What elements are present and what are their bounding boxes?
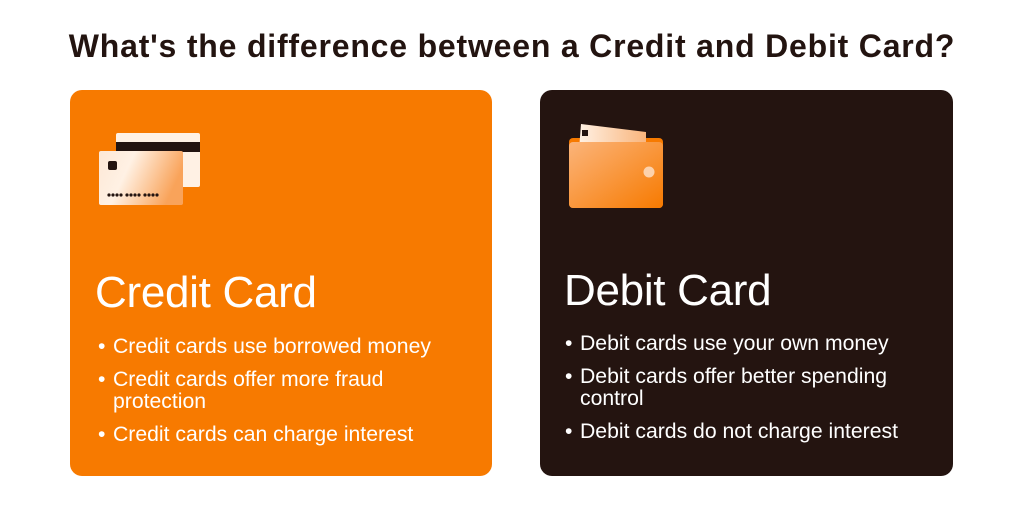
panel: debit card: [540, 90, 953, 476]
bullet list: Credit cards use borrowed money: [113, 335, 431, 358]
bullet list: Debit cards use your own money: [580, 332, 889, 355]
bullet list: Credit cards can charge interest: [113, 423, 413, 446]
bullet list: [566, 332, 898, 443]
icon: wallet: [569, 124, 663, 208]
bullet list: [98, 335, 431, 446]
heading: Debit Card: [564, 266, 771, 315]
heading: Credit Card: [95, 268, 317, 317]
icon: credit cards: [99, 133, 200, 205]
title: What's the difference between a Credit and Debit Card?: [69, 28, 955, 64]
bullet list: Credit cards offer more fraud protection: [113, 368, 383, 413]
bullet list: Debit cards do not charge interest: [580, 420, 898, 443]
bullet list: Debit cards offer better spending control: [580, 365, 887, 410]
panel: credit card: [70, 90, 492, 476]
